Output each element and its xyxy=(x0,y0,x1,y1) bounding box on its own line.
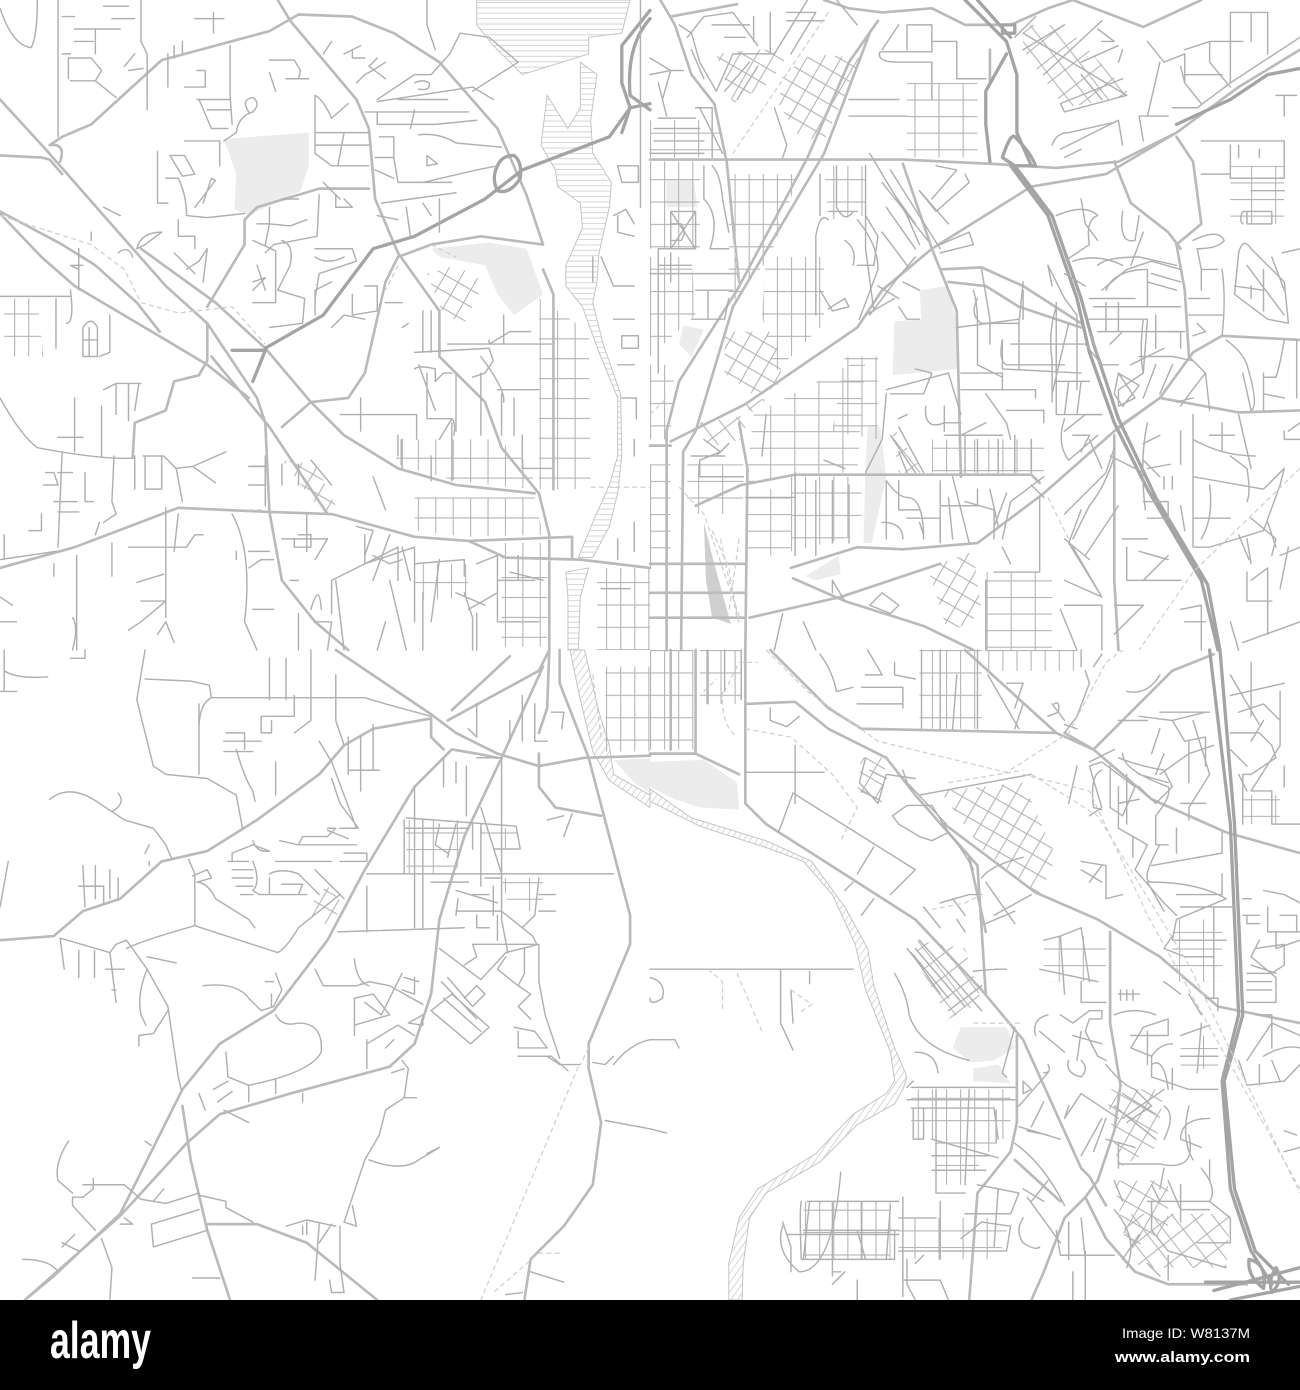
major roads northeast xyxy=(650,0,1300,650)
additional streets northwest xyxy=(174,182,543,650)
highways northeast xyxy=(965,0,1300,650)
northwest quadrant of map xyxy=(0,0,650,650)
local streets northwest xyxy=(0,0,309,218)
local streets southeast xyxy=(708,650,1102,915)
southwest quadrant of map xyxy=(0,650,650,1300)
street grids northeast xyxy=(650,162,1044,551)
street grids southeast xyxy=(650,650,1077,1259)
street grids northwest xyxy=(390,298,591,647)
local streets northeast xyxy=(650,0,986,158)
parks northeast xyxy=(667,180,957,580)
parks southeast xyxy=(650,760,1015,1083)
major roads southeast xyxy=(650,650,1300,1300)
website: www.alamy.com xyxy=(1114,1349,1250,1366)
additional streets southeast xyxy=(1093,662,1284,1201)
major roads northwest xyxy=(0,0,650,650)
footer band xyxy=(0,1300,1300,1390)
river southeast xyxy=(650,789,907,1300)
local streets southwest xyxy=(0,650,431,1123)
southeast quadrant of map xyxy=(650,650,1300,1300)
river southwest xyxy=(570,650,650,808)
parks northwest xyxy=(224,133,543,315)
additional streets northeast xyxy=(650,0,1276,564)
rail yard xyxy=(704,522,731,624)
major roads southwest xyxy=(0,650,650,1300)
rail lines southwest xyxy=(481,675,601,1300)
rail lines southeast xyxy=(704,650,1300,1193)
northeast quadrant of map xyxy=(650,0,1300,650)
rail lines northwest xyxy=(0,216,650,510)
street grids southwest xyxy=(605,667,650,752)
alamy logo: alamy xyxy=(50,1312,151,1370)
highways northwest xyxy=(232,10,650,381)
rail lines northeast xyxy=(650,12,1300,650)
lake and river northwest xyxy=(477,0,630,650)
park southwest xyxy=(614,759,650,793)
image id: Image ID: W8137M xyxy=(1122,1325,1250,1341)
highways southeast xyxy=(1205,650,1300,1300)
